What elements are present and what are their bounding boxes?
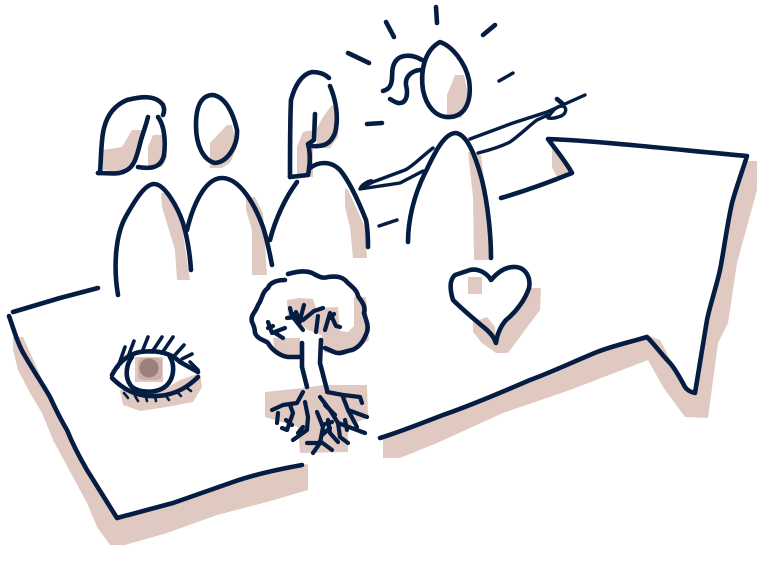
radiating vision lines [348, 7, 513, 226]
icon: tree with roots [252, 271, 369, 453]
arrow: right head section [380, 139, 757, 458]
presenter figure with ponytail and pointing arms [360, 42, 585, 260]
person 2 [187, 95, 272, 275]
arrow: left tail section [9, 288, 308, 545]
icon: eye [112, 337, 202, 411]
icon: heart [451, 267, 541, 353]
person 1 [98, 97, 191, 295]
person 3 [270, 72, 368, 258]
